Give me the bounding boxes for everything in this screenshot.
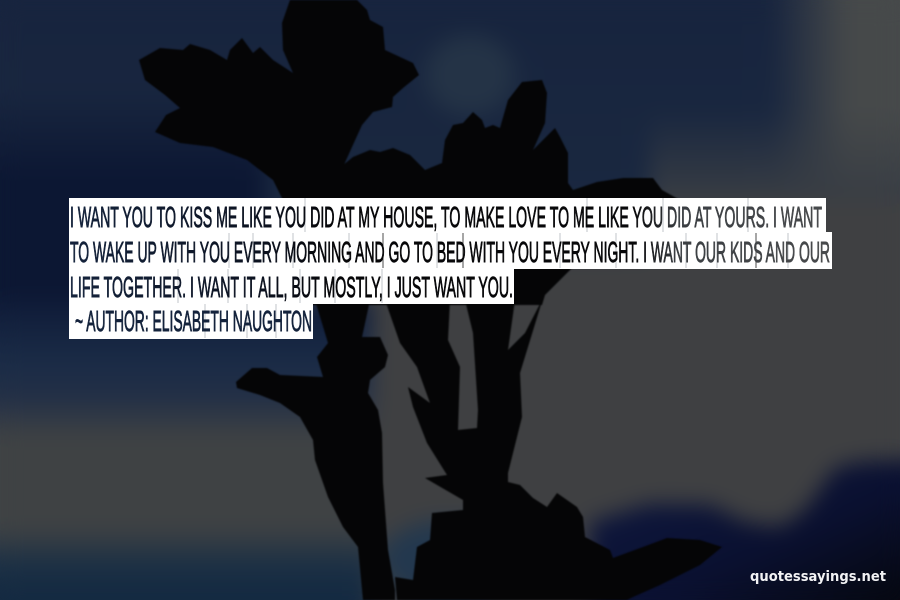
watermark: quotessayings.net (750, 569, 886, 585)
quote text block: ~ AUTHOR: ELISABETH NAUGHTON (75, 306, 312, 338)
left stem with side leaf (236, 300, 395, 600)
quote text block (69, 198, 832, 339)
top leaf cluster (139, 0, 419, 200)
right stem with lower leaf (385, 298, 722, 600)
plant silhouette (139, 0, 722, 600)
blue hill (590, 460, 900, 600)
white highlight bars (69, 198, 832, 339)
right leaf (300, 80, 680, 305)
